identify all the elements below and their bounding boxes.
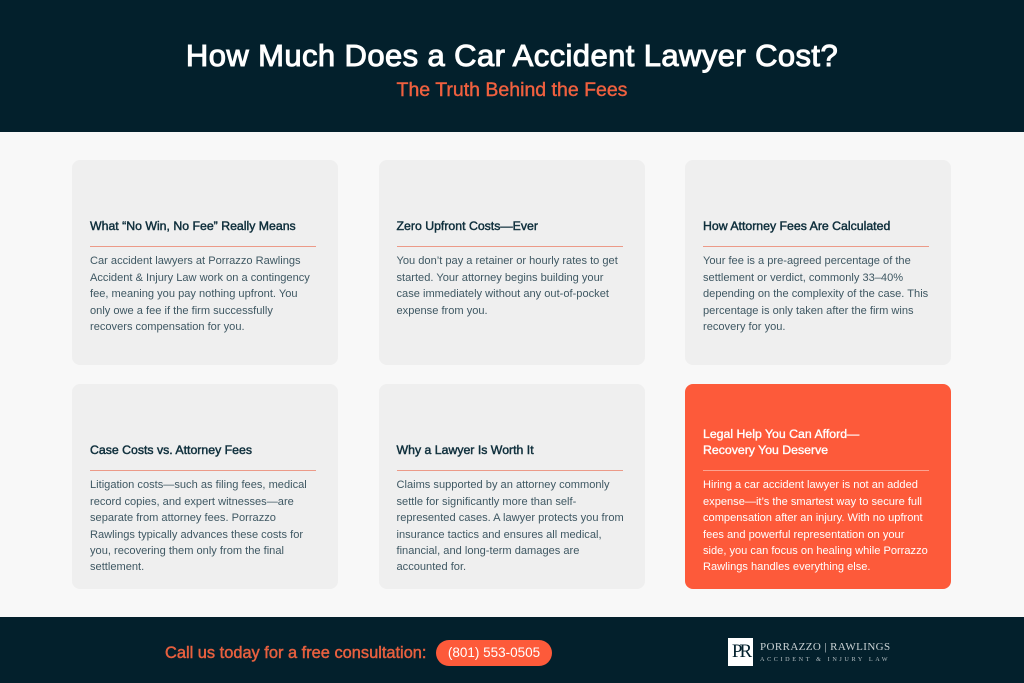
heading: Zero Upfront Costs—Ever (396, 218, 538, 232)
body text: Your fee is a pre-agreed percentage of the (703, 255, 911, 267)
body text: you, recovering them only from the final (90, 545, 284, 557)
panel: how fees are calculated (685, 160, 951, 365)
body text: compensation after an injury. With no upfront (703, 512, 923, 524)
body text: Litigation costs—such as filing fees, medical (90, 479, 307, 491)
body text (90, 255, 310, 333)
body text (90, 479, 307, 573)
body text (396, 255, 618, 317)
body text: settle for significantly more than self- (396, 496, 576, 508)
call to action: Call us today for a free consultation: (165, 644, 426, 662)
header band (0, 0, 1024, 132)
heading: What “No Win, No Fee” Really Means (90, 218, 296, 232)
body text: You don’t pay a retainer or hourly rates to get (396, 255, 618, 267)
body text: Claims supported by an attorney commonly (396, 479, 610, 491)
body text: depending on the complexity of the case. This (703, 288, 928, 300)
panel: case costs vs attorney fees (72, 384, 338, 589)
panel: no win no fee (72, 160, 338, 365)
body text: side, you can focus on healing while Porrazzo (703, 545, 928, 557)
body text (703, 479, 928, 573)
phone button (436, 640, 552, 666)
body text: separate from attorney fees. Porrazzo (90, 512, 276, 524)
logo (728, 638, 891, 666)
body text: fees and powerful representation on your (703, 529, 904, 541)
logo mark (728, 638, 753, 666)
body text: started. Your attorney begins building your (396, 272, 603, 284)
body text: Hiring a car accident lawyer is not an added (703, 479, 918, 491)
heading (703, 426, 860, 457)
logo mark: PR (732, 641, 749, 662)
logo tagline: ACCIDENT & INJURY LAW (760, 656, 890, 663)
body text: only owe a fee if the firm successfully (90, 305, 273, 317)
body text: Accident & Injury Law work on a contingency (90, 272, 310, 284)
panel: why a lawyer is worth it (379, 384, 645, 589)
heading: Why a Lawyer Is Worth It (396, 442, 534, 456)
body text: recovery for you. (703, 321, 786, 333)
heading: Legal Help You Can Afford— (703, 426, 859, 440)
footer band (0, 617, 1024, 683)
panel: legal help you can afford (685, 384, 951, 589)
heading: How Attorney Fees Are Calculated (703, 218, 890, 232)
body text: Car accident lawyers at Porrazzo Rawlings (90, 255, 301, 267)
heading: Recovery You Deserve (703, 442, 828, 456)
body text: case immediately without any out-of-pocket (396, 288, 609, 300)
body text: insurance tactics and ensures all medical, (396, 529, 602, 541)
body text: settlement. (90, 561, 144, 573)
body text: represented cases. A lawyer protects you from (396, 512, 624, 524)
body text: recovers compensation for you. (90, 321, 245, 333)
subtitle: The Truth Behind the Fees (397, 79, 627, 101)
body text: Rawlings typically advances these costs for (90, 529, 303, 541)
body text: settlement or verdict, commonly 33–40% (703, 272, 903, 284)
body text: Rawlings handles everything else. (703, 561, 870, 573)
body text: fee, meaning you pay nothing upfront. You (90, 288, 298, 300)
body text: percentage is only taken after the firm wins (703, 305, 914, 317)
body text (396, 479, 624, 573)
body text: financial, and long-term damages are (396, 545, 579, 557)
body text: accounted for. (396, 561, 466, 573)
body text: expense—it’s the smartest way to secure full (703, 496, 922, 508)
heading: Case Costs vs. Attorney Fees (90, 442, 252, 456)
body text: expense from you. (396, 305, 488, 317)
body text (703, 255, 928, 333)
logo name: PORRAZZO | RAWLINGS (760, 641, 891, 653)
title: How Much Does a Car Accident Lawyer Cost? (186, 38, 838, 73)
phone button: (801) 553-0505 (448, 645, 540, 660)
panel: zero upfront costs (379, 160, 645, 365)
body text: record copies, and expert witnesses—are (90, 496, 294, 508)
